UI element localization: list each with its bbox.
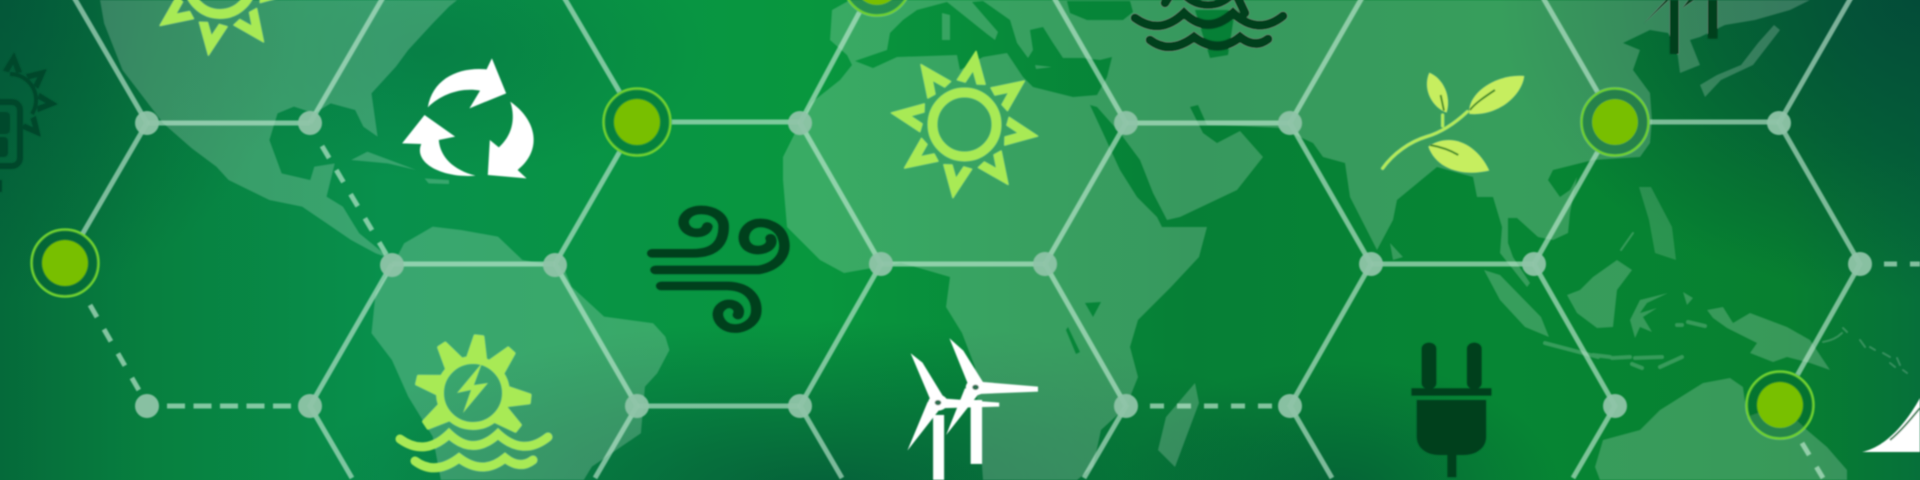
Philippines <box>1639 187 1676 260</box>
Japan <box>1700 25 1780 97</box>
Indonesian and Pacific small islands <box>1545 233 1907 373</box>
Madagascar <box>1158 383 1199 467</box>
icon: dark wind turbines, top <box>1643 0 1718 54</box>
icon: hydro power gear with waves <box>400 335 548 468</box>
hexagon network dashed lines <box>90 146 1920 478</box>
icon: leaf branch <box>1383 73 1524 173</box>
New Guinea <box>1707 307 1830 370</box>
icon: sun, top left <box>145 0 295 57</box>
network nodes <box>135 111 1872 418</box>
Africa and Eurasia with inland seas <box>783 0 1810 480</box>
Sumatra <box>1484 270 1549 337</box>
icon: recycling arrows <box>402 58 534 178</box>
icon: wind swirls <box>652 210 784 329</box>
icon: sun, main <box>889 49 1040 200</box>
icon: solar panel with dark sun, left edge <box>0 52 58 192</box>
Sulawesi <box>1630 293 1668 338</box>
Americas <box>100 0 669 480</box>
Borneo <box>1567 260 1632 328</box>
Halmahera <box>1683 292 1693 305</box>
Sri Lanka <box>1390 243 1403 260</box>
icon: twin wind turbines <box>907 338 1038 480</box>
icon: hydro gear and waves, top dark <box>1135 0 1283 47</box>
Australia <box>1595 378 1847 480</box>
icon: white sail, bottom right <box>1862 398 1920 452</box>
icon: electric plug <box>1411 343 1491 477</box>
